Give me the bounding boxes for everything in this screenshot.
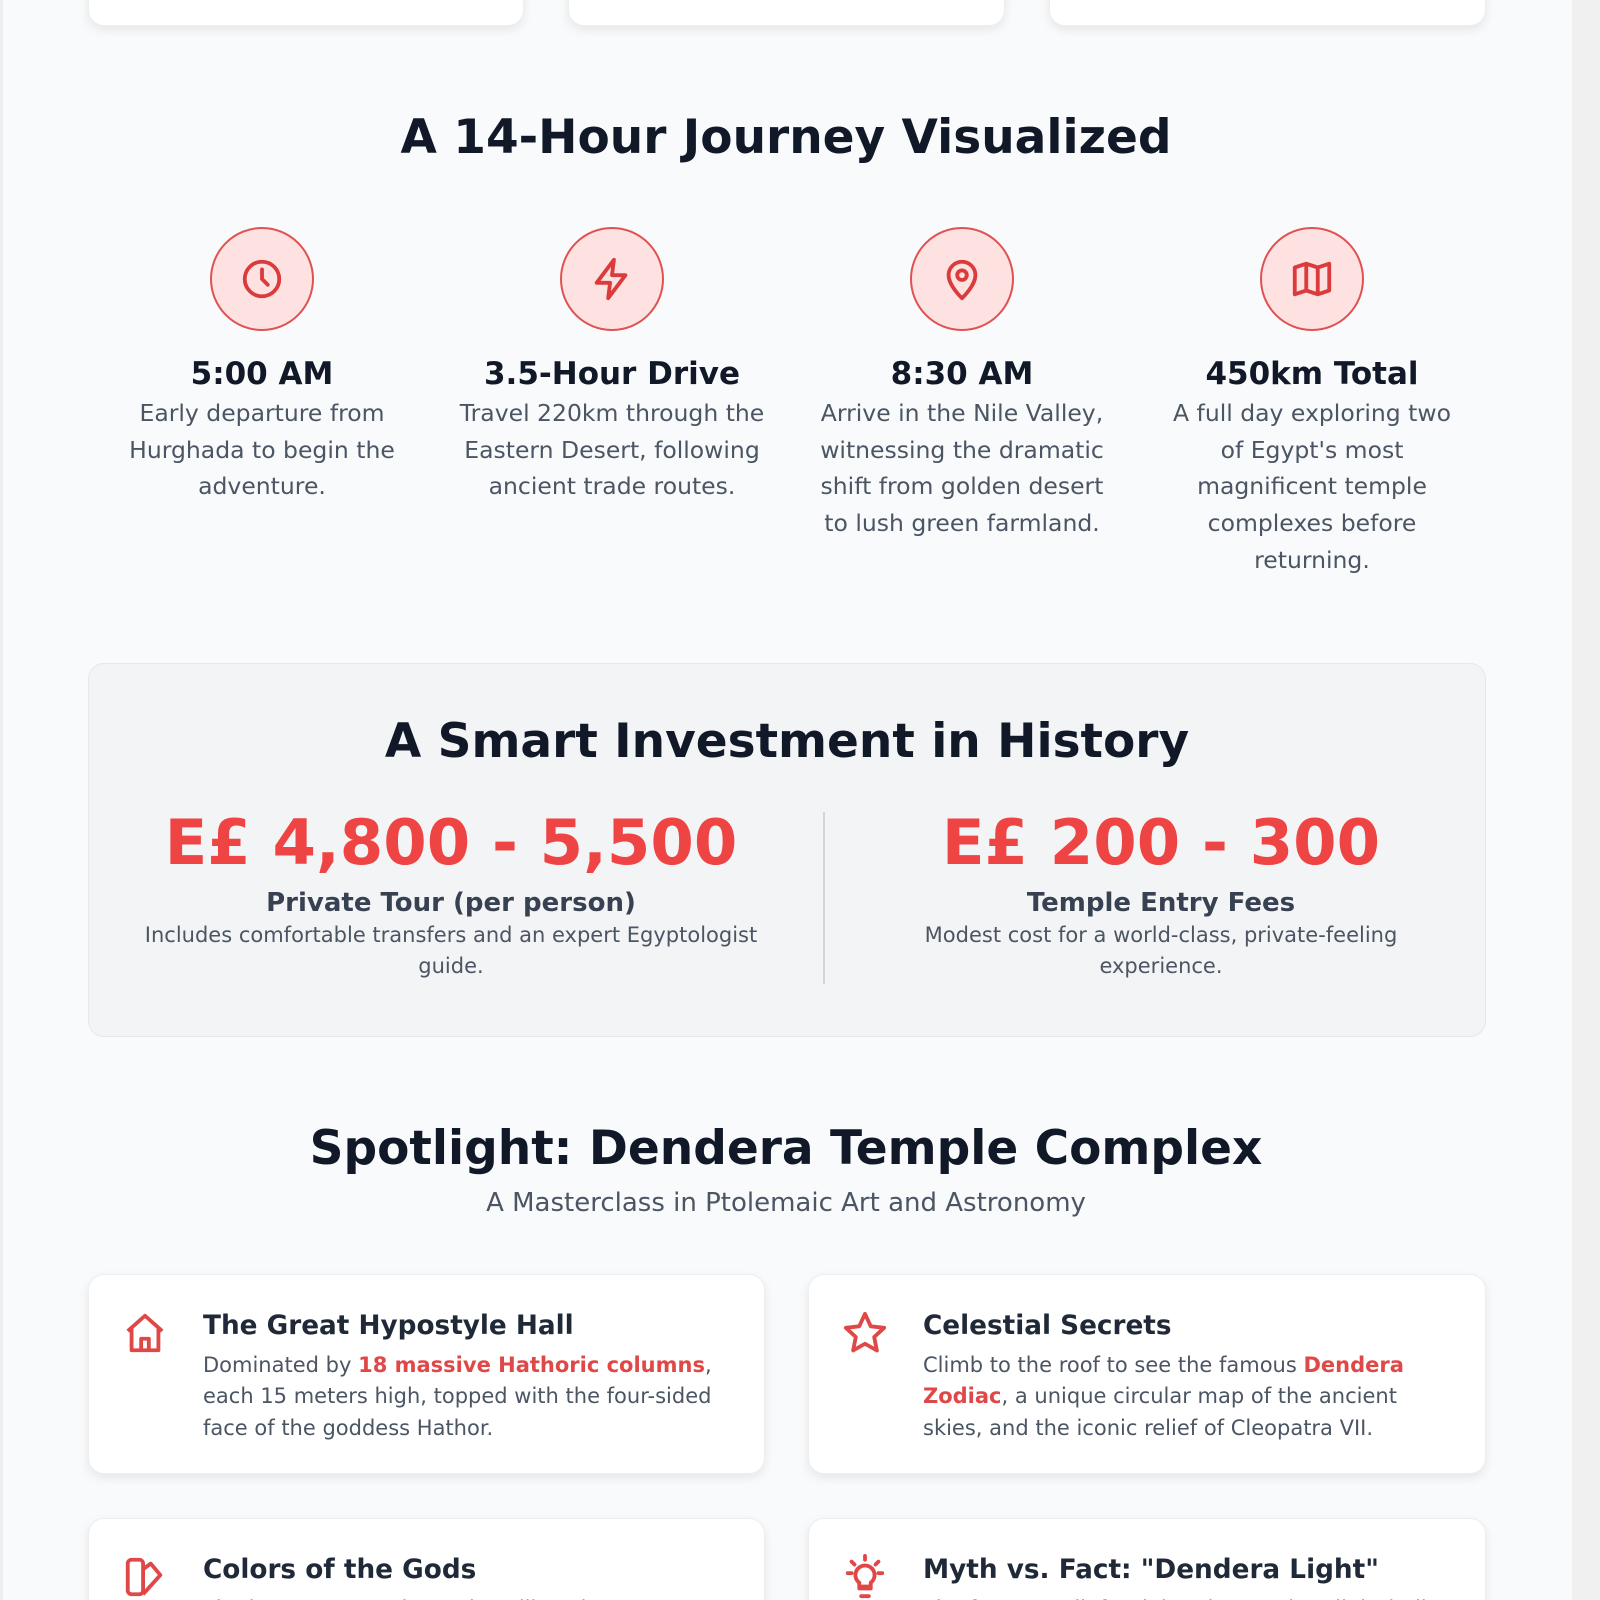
icon: star bbox=[844, 1312, 886, 1352]
card: myth: Myth vs. Fact: "Dendera Light" bbox=[923, 1555, 1379, 1585]
price: private tour: guide. bbox=[418, 954, 484, 978]
title: journey: A 14-Hour Journey Visualized bbox=[401, 110, 1171, 165]
step: 450km: returning. bbox=[1254, 546, 1370, 574]
step: 5:00 AM: 5:00 AM bbox=[191, 356, 333, 392]
subtitle: A Masterclass in Ptolemaic Art and Astronomy bbox=[486, 1188, 1086, 1218]
card: celestial bbox=[808, 1274, 1486, 1474]
icon: house bbox=[126, 1314, 164, 1352]
price: entry fees: Modest cost for a world-class, private-feeling bbox=[925, 923, 1397, 947]
step: drive: 3.5-Hour Drive bbox=[484, 356, 740, 392]
title: investment: A Smart Investment in History bbox=[385, 714, 1189, 769]
step: 5:00 AM: Hurghada to begin the bbox=[129, 436, 395, 464]
step: 8:30 AM bbox=[820, 227, 1104, 537]
price: private tour: E£ 4,800 - 5,500 bbox=[165, 806, 737, 879]
price: private tour: Private Tour (per person) bbox=[266, 888, 636, 918]
icon: clock bbox=[210, 227, 314, 331]
step: 8:30 AM: to lush green farmland. bbox=[824, 509, 1100, 537]
step: 450km: magnificent temple bbox=[1197, 472, 1427, 500]
panel: investment bbox=[88, 663, 1486, 1037]
price: entry fees: experience. bbox=[1099, 954, 1223, 978]
step: 8:30 AM: Arrive in the Nile Valley, bbox=[821, 399, 1103, 427]
step: 5:00 AM: Early departure from bbox=[139, 399, 385, 427]
card: celestial: Celestial Secrets bbox=[923, 1311, 1172, 1341]
step: drive: Travel 220km through the bbox=[460, 399, 764, 427]
journey steps bbox=[129, 227, 1451, 574]
step: drive: Eastern Desert, following bbox=[464, 436, 760, 464]
price: entry fees: E£ 200 - 300 bbox=[942, 806, 1380, 879]
card: myth bbox=[808, 1518, 1486, 1600]
card: colors bbox=[88, 1518, 765, 1600]
step: 5:00 AM bbox=[129, 227, 395, 500]
step: drive bbox=[460, 227, 764, 500]
title: spotlight: Spotlight: Dendera Temple Complex bbox=[310, 1121, 1262, 1176]
icon: bulb bbox=[846, 1554, 884, 1598]
price: private tour bbox=[145, 806, 757, 978]
price: entry fees: Temple Entry Fees bbox=[1027, 888, 1295, 918]
step: 8:30 AM: shift from golden desert bbox=[821, 472, 1103, 500]
price: entry fees bbox=[925, 806, 1397, 978]
step: 450km: 450km Total bbox=[1205, 356, 1419, 392]
step: 8:30 AM: 8:30 AM bbox=[891, 356, 1033, 392]
step: 450km: complexes before bbox=[1208, 509, 1416, 537]
card: hypostyle hall: face of the goddess Hathor. bbox=[203, 1416, 493, 1440]
icon: palette bbox=[126, 1558, 162, 1596]
icon: map bbox=[1260, 227, 1364, 331]
step: 8:30 AM: witnessing the dramatic bbox=[820, 436, 1104, 464]
icon: bolt bbox=[560, 227, 664, 331]
step: 450km: A full day exploring two bbox=[1173, 399, 1451, 427]
card: celestial: Climb to the roof to see the famous Dendera bbox=[923, 1353, 1404, 1377]
step: 450km: of Egypt's most bbox=[1221, 436, 1403, 464]
card: celestial: Zodiac, a unique circular map of the ancient bbox=[923, 1384, 1397, 1408]
step: 5:00 AM: adventure. bbox=[198, 472, 326, 500]
card: hypostyle hall: The Great Hypostyle Hall bbox=[203, 1311, 574, 1341]
step: 450km bbox=[1173, 227, 1451, 574]
card: hypostyle hall bbox=[88, 1274, 765, 1474]
top cards (cut off) bbox=[88, 0, 1486, 30]
icon: pin bbox=[910, 227, 1014, 331]
price: private tour: Includes comfortable transfers and an expert Egyptologist bbox=[145, 923, 757, 947]
card: hypostyle hall: each 15 meters high, topped with the four-sided bbox=[203, 1384, 711, 1408]
card: celestial: skies, and the iconic relief of Cleopatra VII. bbox=[923, 1416, 1373, 1440]
step: drive: ancient trade routes. bbox=[489, 472, 735, 500]
card: colors: Colors of the Gods bbox=[203, 1555, 476, 1585]
card: hypostyle hall: Dominated by 18 massive Hathoric columns, bbox=[203, 1353, 712, 1377]
